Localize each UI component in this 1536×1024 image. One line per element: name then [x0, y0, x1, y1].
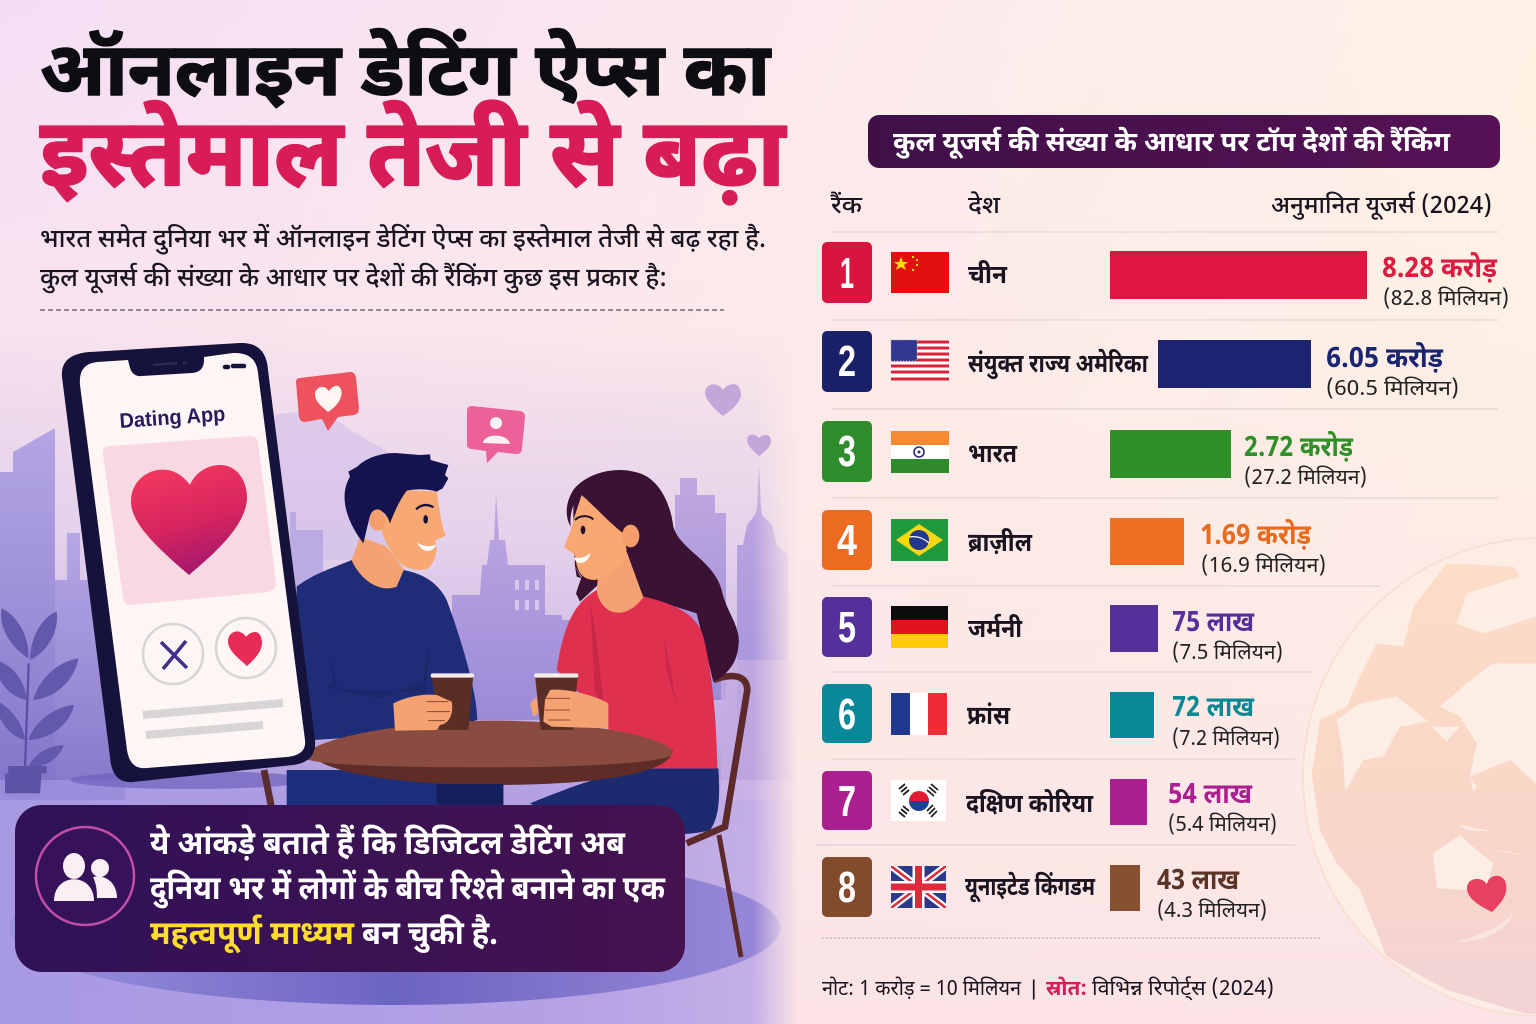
- row 1: China: 8.28 करोड़: [1382, 251, 1498, 289]
- shadow under phone: [70, 771, 310, 789]
- flag: France: [891, 693, 947, 735]
- chair behind man: [264, 770, 272, 810]
- table column headers: देश: [968, 191, 1001, 223]
- row 6: France: [822, 684, 1280, 754]
- flag: Germany: [891, 606, 948, 648]
- row 7: South Korea: दक्षिण कोरिया: [966, 789, 1094, 823]
- cups: [431, 673, 578, 730]
- row 1: China: [822, 242, 1509, 314]
- row 5: Germany: 75 लाख: [1172, 607, 1254, 643]
- row 6: France: 6: [838, 690, 856, 739]
- callout text: दुनिया भर में लोगों के बीच रिश्ते बनाने का एक: [150, 868, 666, 913]
- row 8: United Kingdom: 8: [838, 863, 856, 912]
- row 2: USA: [822, 331, 1459, 404]
- icon: plant: [0, 608, 78, 793]
- intro text: कुल यूजर्स की संख्या के आधार पर देशों की रैंकिंग कुछ इस प्रकार है:: [40, 262, 667, 297]
- row 2: USA: (60.5 मिलियन): [1326, 376, 1459, 404]
- icon: heart chat bubble: [296, 372, 359, 431]
- panel header: कुल यूजर्स की संख्या के आधार पर टॉप देशों की रैंकिंग: [893, 126, 1451, 163]
- row 1: China: 1: [840, 249, 854, 298]
- row 4: Brazil: ब्राज़ील: [968, 528, 1033, 562]
- flag: India: [891, 431, 949, 473]
- row 5: Germany: 5: [838, 603, 856, 652]
- row 1: China: चीन: [968, 260, 1008, 294]
- panel header: [868, 115, 1500, 168]
- table column headers: रैंक: [830, 191, 863, 223]
- row 6: France: (7.2 मिलियन): [1172, 726, 1280, 754]
- hands: [393, 690, 608, 731]
- intro text: [40, 223, 766, 297]
- row 3: India: 3: [838, 427, 856, 476]
- row 5: Germany: (7.5 मिलियन): [1172, 640, 1283, 668]
- footnote: विभिन्न रिपोर्ट्स (2024): [1092, 976, 1274, 1004]
- button: like: [216, 618, 276, 678]
- flag: United Kingdom: [891, 866, 946, 908]
- row 8: United Kingdom: 43 लाख: [1157, 865, 1239, 901]
- phone: [62, 343, 315, 782]
- row 8: United Kingdom: [822, 857, 1267, 926]
- man: [287, 453, 503, 807]
- phone heading: Dating App: [119, 403, 226, 433]
- row 7: South Korea: 54 लाख: [1168, 779, 1252, 815]
- row 7: South Korea: [822, 771, 1277, 840]
- row 5: Germany: जर्मनी: [968, 613, 1023, 648]
- icon: big heart: [131, 465, 247, 575]
- title: [40, 28, 787, 224]
- illustration backdrop: city skyline: [0, 391, 794, 1024]
- footnote: स्रोत:: [1046, 976, 1087, 1004]
- phone profile card: [103, 436, 276, 605]
- row 8: United Kingdom: यूनाइटेड किंगडम: [965, 871, 1096, 906]
- row 4: Brazil: [822, 510, 1326, 581]
- row 7: South Korea: 7: [838, 777, 856, 826]
- row 8: United Kingdom: (4.3 मिलियन): [1157, 898, 1267, 926]
- row 3: India: 2.72 करोड़: [1244, 430, 1354, 468]
- table: [303, 721, 673, 805]
- footnote: [822, 976, 1274, 1004]
- woman: [530, 470, 739, 834]
- callout text: बन चुकी है.: [362, 913, 498, 958]
- row 4: Brazil: (16.9 मिलियन): [1201, 553, 1326, 581]
- footnote: |: [1031, 977, 1036, 1000]
- row 3: India: भारत: [968, 439, 1018, 473]
- callout text: ये आंकड़े बताते हैं कि डिजिटल डेटिंग अब: [150, 823, 626, 868]
- row 2: USA: 6.05 करोड़: [1326, 341, 1444, 379]
- row 4: Brazil: 4: [837, 516, 857, 565]
- row 2: USA: 2: [838, 337, 856, 386]
- icon: profile chat bubble: [467, 406, 525, 463]
- table column headers: अनुमानित यूजर्स (2024): [1271, 191, 1492, 223]
- title: इस्तेमाल तेजी से बढ़ा: [40, 100, 787, 224]
- icon: red heart: [1467, 876, 1506, 912]
- row 2: USA: संयुक्त राज्य अमेरिका: [968, 349, 1149, 383]
- callout text: महत्वपूर्ण माध्यम: [150, 914, 354, 958]
- button: reject: [143, 624, 203, 684]
- footnote: नोट: 1 करोड़ = 10 मिलियन: [822, 976, 1021, 1004]
- icon: users: [36, 827, 134, 925]
- flag: China: [891, 252, 949, 293]
- row 1: China: (82.8 मिलियन): [1383, 286, 1509, 314]
- placeholder lines: [143, 703, 283, 735]
- row 4: Brazil: 1.69 करोड़: [1200, 518, 1312, 556]
- callout: [15, 805, 685, 972]
- table column headers: [830, 191, 1492, 223]
- flag: Brazil: [891, 519, 948, 561]
- row 3: India: [822, 421, 1367, 493]
- flag: South Korea: [891, 780, 946, 821]
- icon: purple hearts: [705, 384, 771, 456]
- flag: USA: [891, 340, 949, 381]
- title: ऑनलाइन डेटिंग ऐप्स का: [40, 28, 771, 126]
- row 3: India: (27.2 मिलियन): [1244, 465, 1367, 493]
- row 7: South Korea: (5.4 मिलियन): [1168, 812, 1277, 840]
- row 5: Germany: [822, 597, 1283, 668]
- globe illustration: [1303, 538, 1536, 1017]
- intro text: भारत समेत दुनिया भर में ऑनलाइन डेटिंग ऐप्स का इस्तेमाल तेजी से बढ़ रहा है.: [40, 223, 766, 258]
- woman's chair leg: [719, 835, 741, 957]
- illustration: couple at table: [287, 453, 747, 843]
- row 6: France: फ्रांस: [967, 701, 1011, 735]
- woman's chair: [687, 676, 747, 843]
- callout text: [150, 823, 666, 958]
- row 6: France: 72 लाख: [1172, 692, 1254, 728]
